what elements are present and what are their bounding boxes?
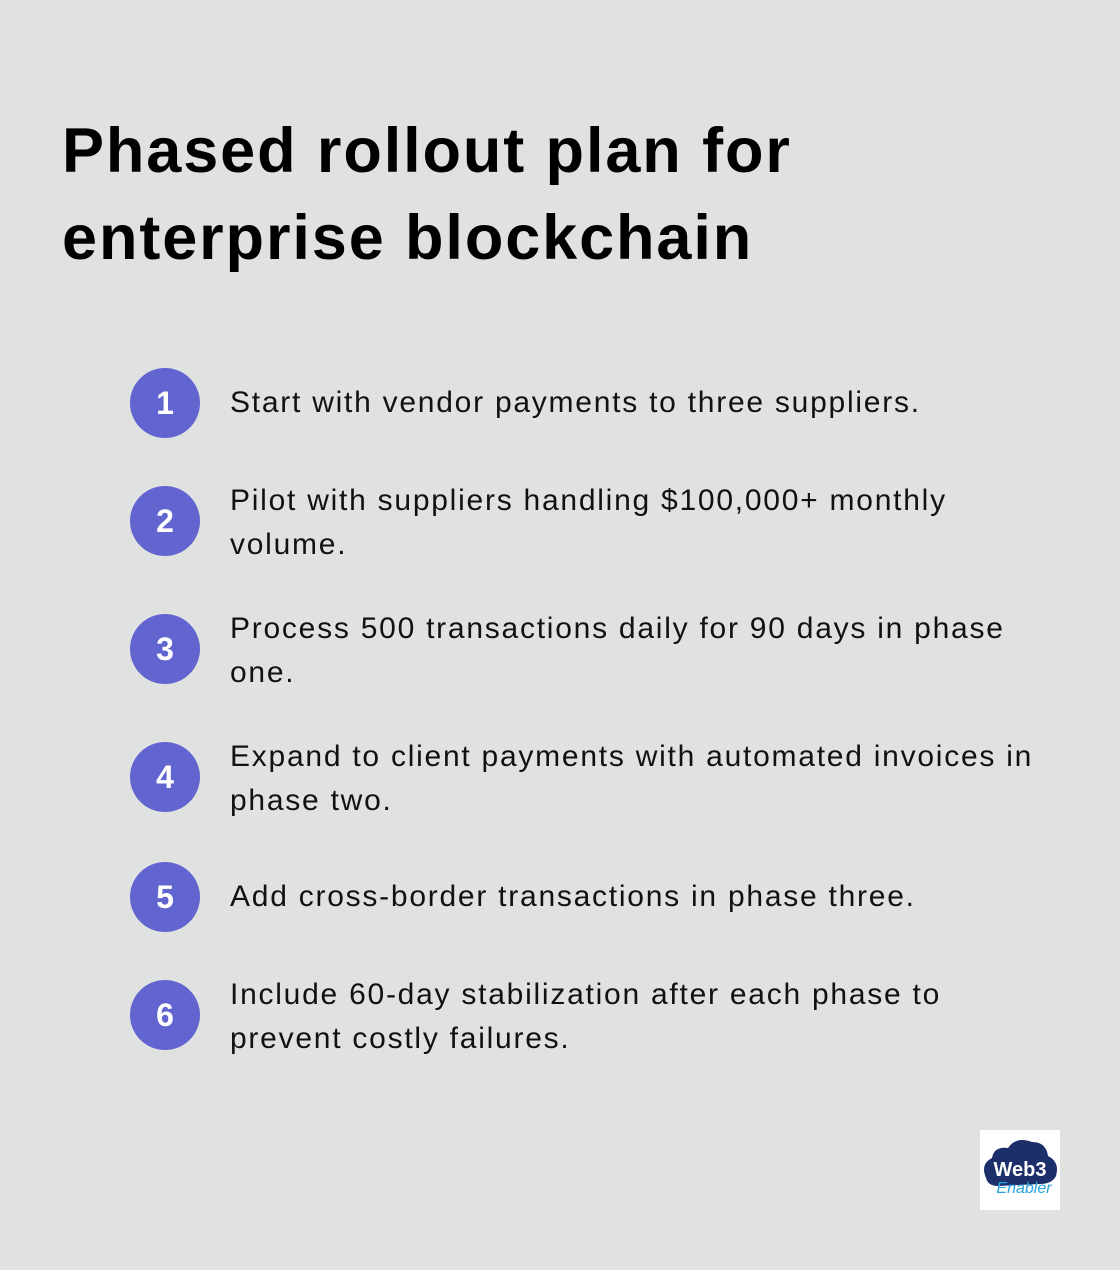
step 1: 1 xyxy=(156,385,174,421)
step 6 xyxy=(130,978,941,1055)
step 4 xyxy=(130,740,1033,817)
step 2: 2 xyxy=(156,503,174,539)
step 2: volume. xyxy=(230,528,347,561)
step 1: Start with vendor payments to three suppliers. xyxy=(230,386,921,419)
step 6: 6 xyxy=(156,997,174,1033)
step 2 xyxy=(130,484,947,561)
step 3: one. xyxy=(230,656,295,689)
step 3 xyxy=(130,612,1005,689)
step 6: prevent costly failures. xyxy=(230,1022,570,1055)
logo xyxy=(980,1130,1060,1210)
title xyxy=(62,116,792,273)
step 3: Process 500 transactions daily for 90 days in phase xyxy=(230,612,1005,645)
title: Phased rollout plan for xyxy=(62,116,792,186)
step 4: phase two. xyxy=(230,784,393,817)
title: enterprise blockchain xyxy=(62,203,753,273)
step 1 xyxy=(130,368,921,438)
logo: Web3 xyxy=(994,1159,1046,1181)
step 5: Add cross-border transactions in phase three. xyxy=(230,880,916,913)
step 3: 3 xyxy=(156,631,174,667)
step 5 xyxy=(130,862,916,932)
step 4: 4 xyxy=(156,759,174,795)
step 4: Expand to client payments with automated invoices in xyxy=(230,740,1033,773)
step 5: 5 xyxy=(156,879,174,915)
step 6: Include 60-day stabilization after each phase to xyxy=(230,978,941,1011)
logo: Enabler xyxy=(996,1180,1052,1197)
step 2: Pilot with suppliers handling $100,000+ monthly xyxy=(230,484,947,517)
